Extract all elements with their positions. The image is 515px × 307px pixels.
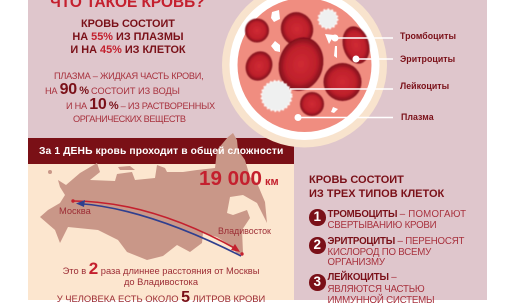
city label: Moscow: Москва (59, 206, 91, 216)
text: leukocytes: ЛЕЙКОЦИТЫ – (328, 272, 396, 283)
text: erythrocytes: ЭРИТРОЦИТЫ – ПЕРЕНОСЯТ (328, 236, 464, 247)
text: leukocytes: ЯВЛЯЮТСЯ ЧАСТЬЮ (328, 284, 424, 294)
number 2 (309, 237, 326, 254)
comparison text (63, 259, 259, 287)
composition heading: КРОВЬ СОСТОИТ (81, 18, 175, 30)
text: leukocytes: ИММУННОЙ СИСТЕМЫ (328, 295, 434, 306)
number 3 (309, 274, 326, 290)
text: leukocytes (328, 270, 434, 306)
icon: white cells (262, 10, 338, 111)
plasma text: И НА 10 % – ИЗ РАСТВОРЕННЫХ (66, 96, 215, 113)
map of Russia (40, 133, 267, 260)
panel: distance (28, 164, 294, 300)
plasma text: ОРГАНИЧЕСКИХ ВЕЩЕСТВ (73, 114, 186, 124)
text: erythrocytes: КИСЛОРОД ПО ВСЕМУ (328, 246, 431, 258)
cell types heading: ИЗ ТРЕХ ТИПОВ КЛЕТОК (309, 188, 444, 200)
blood volume text: У ЧЕЛОВЕКА ЕСТЬ ОКОЛО 5 ЛИТРОВ КРОВИ (57, 289, 265, 306)
plasma text (45, 71, 215, 124)
labels: plasma: Плазма (401, 112, 434, 122)
comparison text: Это в 2 раза длиннее расстояния от Москвы (63, 259, 259, 278)
composition heading (70, 18, 186, 56)
icon: platelets (271, 10, 338, 113)
callout lines (290, 35, 393, 120)
plasma text: ПЛАЗМА – ЖИДКАЯ ЧАСТЬ КРОВИ, (54, 71, 203, 81)
header band (28, 138, 294, 164)
cell types heading: КРОВЬ СОСТОИТ (309, 174, 404, 186)
plasma text: НА 90 % СОСТОИТ ИЗ ВОДЫ (45, 81, 180, 98)
distance value: 19 000 км (199, 167, 279, 190)
text: thrombocytes: ТРОМБОЦИТЫ – ПОМОГАЮТ (328, 209, 466, 220)
text: erythrocytes: ОРГАНИЗМУ (328, 257, 385, 268)
text: thrombocytes (328, 209, 466, 230)
city label: Vladivostok: Владивосток (218, 226, 271, 236)
number 3: 3 (313, 274, 321, 289)
labels: erythrocytes: Эритроциты (400, 54, 455, 64)
comparison text: до Владивостока (124, 277, 198, 287)
text: erythrocytes (328, 236, 464, 268)
number 2: 2 (313, 237, 321, 252)
labels: leukocytes: Лейкоциты (400, 81, 449, 91)
icon: red cells (241, 7, 373, 116)
number 1: 1 (313, 209, 321, 224)
composition heading: НА 55% ИЗ ПЛАЗМЫ (72, 31, 184, 43)
text: thrombocytes: СВЕРТЫВАНИЮ КРОВИ (328, 220, 436, 230)
cell types heading (309, 174, 444, 200)
composition heading: И НА 45% ИЗ КЛЕТОК (70, 44, 186, 56)
route arrows (71, 199, 244, 256)
number 1 (309, 209, 326, 226)
header text: За 1 ДЕНЬ кровь проходит в общей сложности (39, 146, 283, 157)
labels: thrombocytes: Тромбоциты (400, 31, 456, 41)
